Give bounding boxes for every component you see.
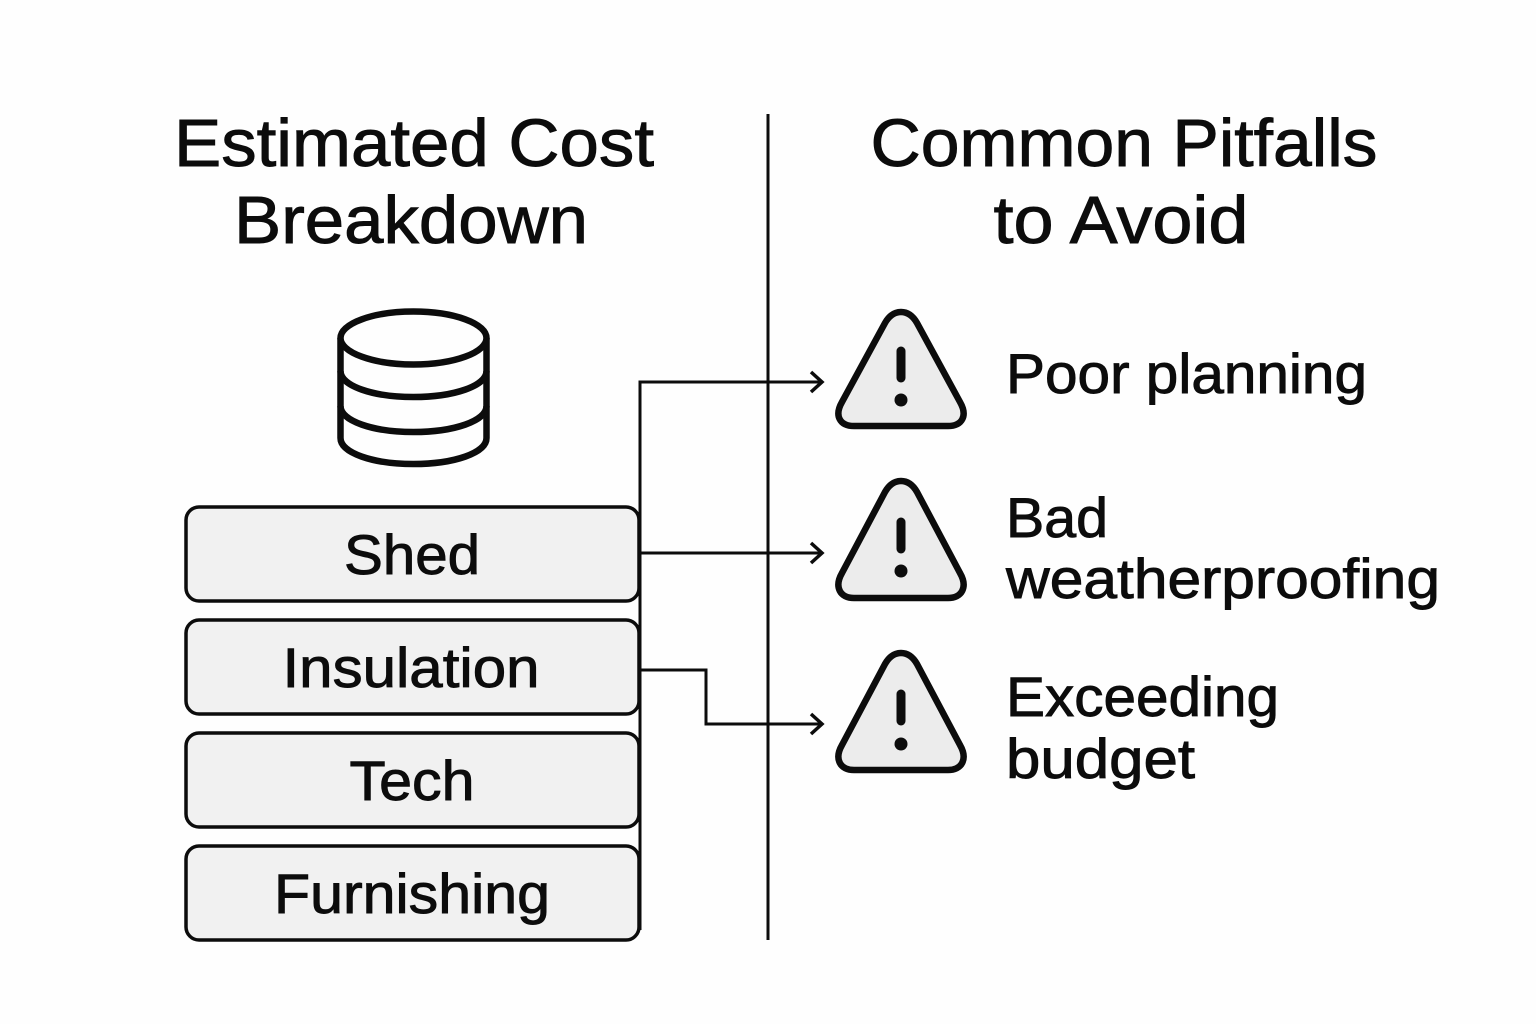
panel: Tech (186, 733, 639, 827)
heading: Common Pitfalls to Avoid (870, 106, 1378, 258)
icon: warning triangle 1 (838, 312, 964, 426)
icon: warning triangle 2 (838, 481, 964, 598)
heading: Common Pitfalls to Avoid: to Avoid (994, 183, 1248, 258)
text: Bad weatherproofing (1005, 486, 1440, 610)
panel: Furnishing: Furnishing (274, 862, 550, 925)
panel: Tech: Tech (350, 749, 474, 812)
panel: Furnishing (186, 846, 639, 940)
text: Exceeding budget: Exceeding (1006, 665, 1279, 728)
text: Bad weatherproofing: weatherproofing (1005, 547, 1440, 610)
panel: Insulation: Insulation (282, 636, 540, 699)
text: Poor planning: Poor planning (1006, 342, 1367, 405)
connector: vertical spine and arrows (640, 372, 822, 930)
center divider line (766, 114, 770, 940)
icon: stacked database (340, 312, 486, 464)
heading: Common Pitfalls to Avoid: Common Pitfalls (870, 106, 1378, 181)
text: Bad weatherproofing: Bad (1006, 486, 1108, 549)
heading: Estimated Cost Breakdown (174, 106, 654, 258)
panel: Insulation (186, 620, 639, 714)
panel: Shed (186, 507, 639, 601)
text: Exceeding budget (1006, 665, 1279, 790)
heading: Estimated Cost Breakdown: Breakdown (234, 183, 588, 258)
icon: warning triangle 3 (838, 653, 964, 770)
panel: Shed: Shed (344, 523, 480, 586)
text: Exceeding budget: budget (1006, 727, 1195, 790)
heading: Estimated Cost Breakdown: Estimated Cost (174, 106, 654, 181)
